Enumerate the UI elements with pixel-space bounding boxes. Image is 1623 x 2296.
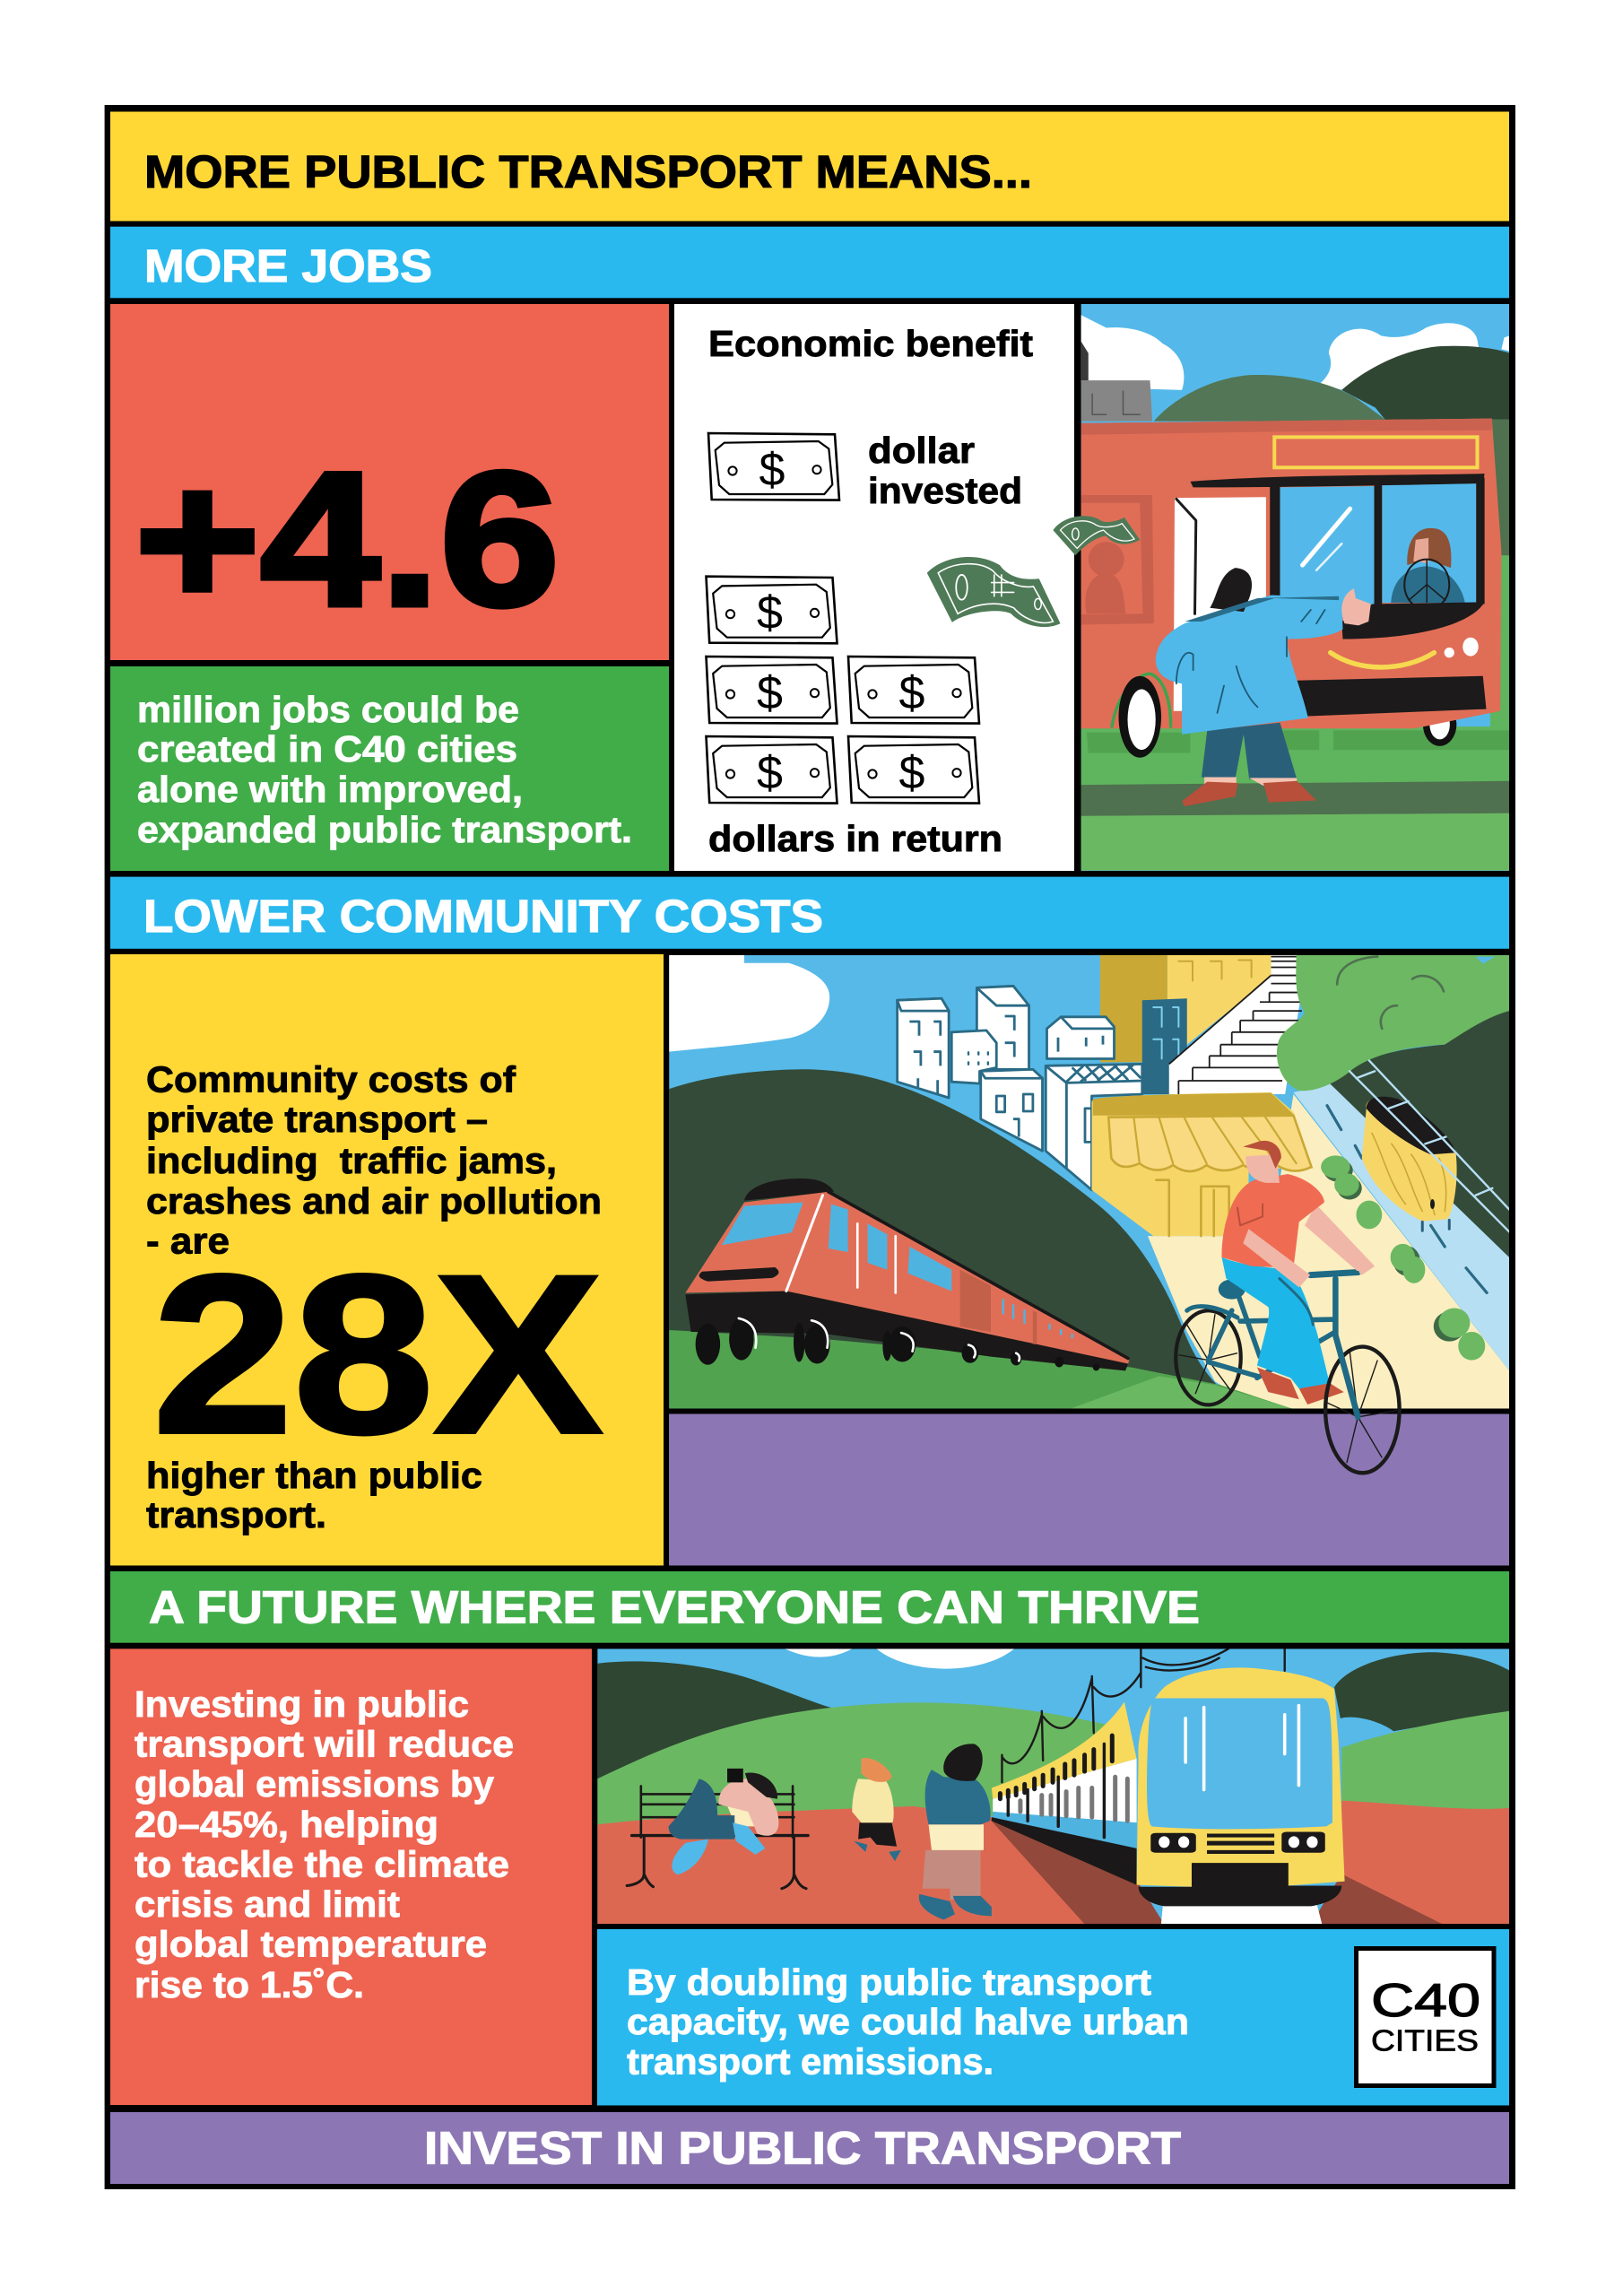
text above the statistic: crashes and air pollution bbox=[146, 1180, 602, 1222]
yellow shop bbox=[1092, 1092, 1313, 1236]
panel: +4.6 statistic bbox=[110, 304, 669, 660]
panel: emissions text: global temperature bbox=[135, 1924, 487, 1965]
red train bbox=[685, 1178, 1130, 1370]
statistic: 28X: 28X bbox=[152, 1229, 603, 1481]
text below the statistic: higher than public bbox=[146, 1455, 482, 1496]
logo: C40 Cities bbox=[1356, 1948, 1494, 2086]
panel: emissions text: crisis and limit bbox=[135, 1883, 400, 1925]
panel: emissions text: 20–45%, helping bbox=[135, 1804, 438, 1845]
dollar invested label bbox=[868, 430, 1022, 511]
logo: C40 Cities: C40 bbox=[1371, 1975, 1480, 2027]
icon: five dollar bills: $ bbox=[757, 587, 783, 639]
dollar invested label: invested bbox=[868, 470, 1022, 511]
woman waiting bbox=[919, 1744, 992, 1919]
overhead wires bbox=[1002, 1648, 1285, 1782]
text above the statistic: private transport – bbox=[146, 1099, 488, 1140]
icon: five dollar bills: $ bbox=[757, 667, 783, 719]
footer: invest in public transport: INVEST IN PUBLIC TRANSPORT bbox=[424, 2123, 1181, 2174]
section heading: a future where everyone can thrive: A FUTURE WHERE EVERYONE CAN THRIVE bbox=[149, 1581, 1200, 1632]
panel: emissions text: Investing in public bbox=[135, 1683, 469, 1725]
icon: five dollar bills: $ bbox=[899, 667, 925, 719]
panel: emissions text: rise to 1.5˚C. bbox=[135, 1964, 364, 2005]
panel: emissions text: to tackle the climate bbox=[135, 1843, 509, 1884]
illustration: train, city and cyclist bbox=[669, 955, 1510, 1410]
page frame bbox=[105, 105, 1515, 2189]
panel: emissions text: global emissions by bbox=[135, 1763, 494, 1805]
panel: purple block bbox=[669, 1413, 1509, 1566]
section heading: lower community costs: LOWER COMMUNITY COSTS bbox=[143, 891, 823, 942]
panel: doubling capacity text: capacity, we could halve urban bbox=[627, 2001, 1189, 2042]
panel: million jobs text: alone with improved, bbox=[137, 769, 523, 810]
panel: million jobs text: million jobs could be bbox=[137, 689, 519, 730]
illustration: bus and passenger bbox=[1081, 302, 1513, 874]
section heading: more jobs bbox=[110, 227, 1509, 298]
text above the statistic: including traffic jams, bbox=[146, 1140, 557, 1181]
panel: doubling capacity text: By doubling public transport bbox=[627, 1961, 1151, 2003]
panel: economic benefit bbox=[674, 304, 1074, 871]
passenger figure bbox=[1156, 568, 1371, 806]
footer: invest in public transport bbox=[110, 2112, 1509, 2184]
panel: doubling capacity text bbox=[597, 1929, 1509, 2106]
section heading: lower community costs bbox=[110, 877, 1509, 949]
section heading: more jobs: MORE JOBS bbox=[144, 240, 432, 291]
section heading: a future where everyone can thrive bbox=[110, 1571, 1509, 1643]
white city buildings bbox=[898, 986, 1142, 1190]
dollars in return label: dollars in return bbox=[708, 818, 1002, 859]
panel: million jobs text: created in C40 cities bbox=[137, 728, 517, 770]
text below the statistic bbox=[146, 1455, 482, 1535]
panel: doubling capacity text: transport emissions. bbox=[627, 2041, 994, 2083]
panel: +4.6 statistic: +4.6 bbox=[135, 432, 560, 646]
header: main title bbox=[110, 111, 1509, 221]
yellow train bbox=[992, 1667, 1345, 1906]
illustration: yellow train at platform bbox=[597, 1648, 1511, 1924]
text above the statistic: Community costs of bbox=[146, 1058, 516, 1100]
icon: five dollar bills: $ bbox=[899, 747, 925, 799]
icon: five dollar bills: $ bbox=[757, 747, 783, 799]
icon: single dollar bill bbox=[708, 433, 839, 500]
text above the statistic bbox=[146, 1058, 602, 1261]
bench and reclining person bbox=[627, 1769, 808, 1889]
child walking bbox=[852, 1758, 901, 1861]
dollar invested label: dollar bbox=[868, 430, 975, 471]
panel: million jobs text: expanded public transport. bbox=[137, 809, 632, 850]
text below the statistic: transport. bbox=[146, 1494, 326, 1535]
economic benefit heading: Economic benefit bbox=[708, 323, 1033, 364]
logo: C40 Cities: CITIES bbox=[1371, 2023, 1479, 2057]
panel: million jobs text bbox=[110, 666, 669, 871]
text above the statistic: - are bbox=[146, 1220, 230, 1261]
panel: emissions text bbox=[110, 1648, 592, 2105]
icon: five dollar bills bbox=[707, 577, 979, 804]
yellow tram bbox=[1350, 1060, 1509, 1231]
panel: 28X community costs bbox=[110, 954, 664, 1566]
header: main title: MORE PUBLIC TRANSPORT MEANS... bbox=[144, 146, 1032, 197]
panel: emissions text: transport will reduce bbox=[135, 1724, 514, 1765]
illustration: cyclist riding over the panel edge bbox=[1176, 1141, 1400, 1473]
icon: single dollar bill: $ bbox=[759, 444, 785, 496]
icon: flying banknotes bbox=[927, 516, 1140, 627]
